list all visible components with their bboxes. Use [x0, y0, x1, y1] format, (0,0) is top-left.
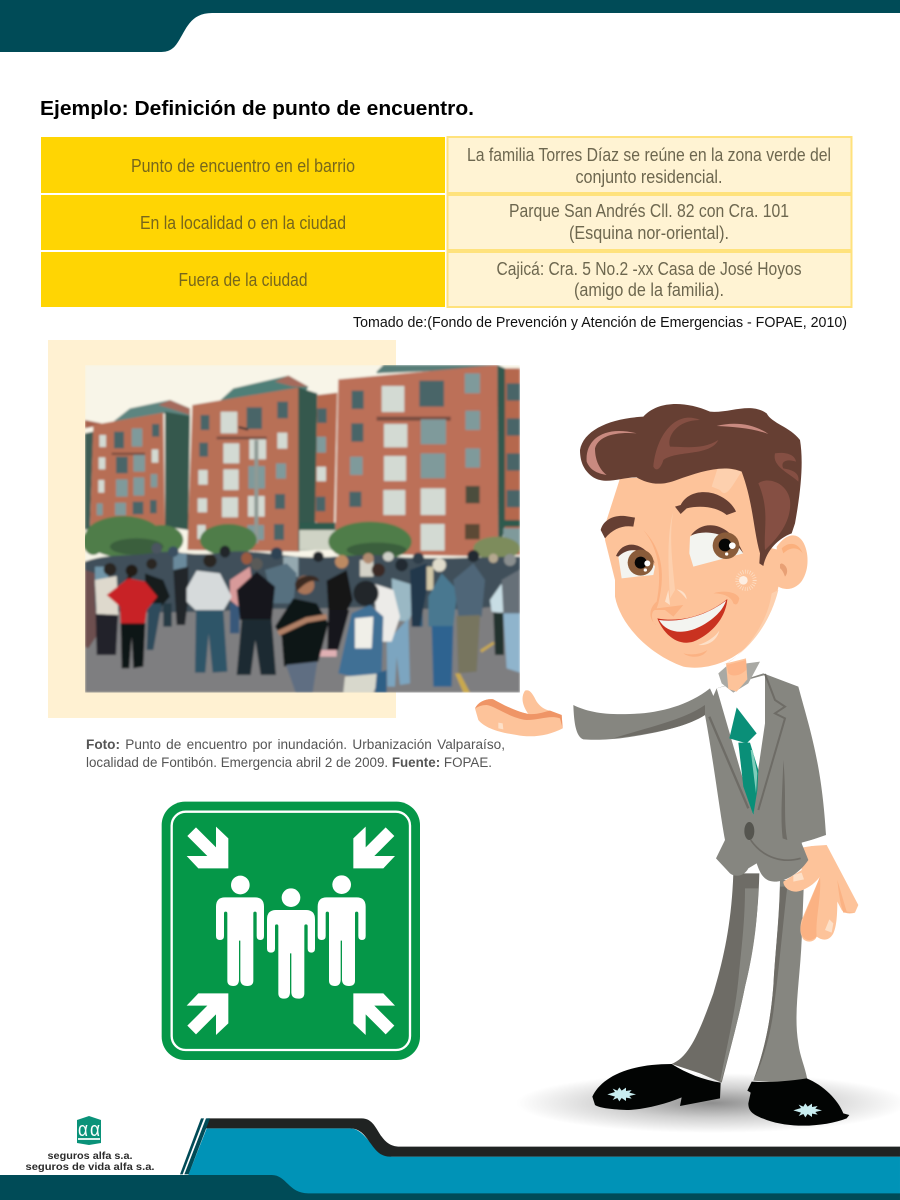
logo: seguros alfa: seguros de vida alfa s.a. — [26, 1162, 155, 1173]
character: man in grey suit presenting — [475, 404, 900, 1133]
photo caption — [86, 737, 505, 770]
teal stripes — [180, 1118, 210, 1174]
footer band — [0, 1118, 900, 1200]
table: punto de encuentro — [41, 137, 852, 307]
sleeve — [573, 688, 717, 740]
cream photo backing — [48, 340, 396, 718]
source credit: Tomado de:(Fondo de Prevención y Atención de Emergencias - FOPAE, 2010) — [353, 315, 847, 331]
left eye — [618, 550, 655, 578]
head and arm — [475, 404, 808, 740]
title: Ejemplo: Definición de punto de encuentro. — [40, 97, 474, 120]
row 3: Fuera de la ciudad — [178, 269, 308, 290]
people — [95, 550, 520, 693]
blue panel — [188, 1128, 900, 1195]
trees — [83, 516, 520, 562]
tie — [729, 707, 758, 815]
row 1: Punto de encuentro en el barrio — [131, 155, 355, 176]
eyebrows — [601, 516, 635, 538]
row 1: La familia Torres Díaz se reúne en la zona verde del — [467, 144, 831, 165]
left hand — [475, 690, 563, 736]
ear — [777, 535, 808, 589]
row 3: Cajicá: Cra. 5 No.2 -xx Casa de José Hoyos — [496, 258, 802, 279]
mouth — [657, 599, 727, 643]
photo caption: Foto: Punto de encuentro por inundación. Urbanización Valparaíso, — [86, 737, 505, 752]
logo: seguros alfa — [26, 1116, 155, 1173]
row 2: En la localidad o en la ciudad — [140, 212, 346, 233]
three people — [216, 875, 366, 999]
floor shadow — [516, 1073, 900, 1133]
row 1: conjunto residencial. — [576, 166, 722, 187]
face — [605, 465, 780, 668]
arrows pointing to centre — [187, 827, 395, 1035]
dark teal base — [0, 1175, 900, 1200]
building left — [85, 400, 190, 530]
building right — [299, 365, 520, 557]
jacket — [705, 673, 827, 882]
row 3: (amigo de la familia). — [574, 279, 724, 300]
logo: seguros alfa: seguros alfa s.a. — [48, 1151, 133, 1162]
pavement — [85, 603, 520, 693]
nose — [643, 530, 683, 625]
building centre — [187, 375, 337, 552]
neck — [726, 658, 747, 692]
sparkle on cheek — [739, 576, 748, 585]
row 1 — [41, 137, 852, 193]
row 3 — [41, 252, 852, 307]
photo caption: localidad de Fontibón. Emergencia abril 2 de 2009. Fuente: FOPAE. — [86, 755, 492, 770]
right eye — [689, 531, 743, 567]
row 2 — [41, 195, 852, 250]
collar — [718, 662, 760, 693]
right hand — [783, 845, 858, 942]
background crowd mass — [85, 551, 520, 612]
row 2: Parque San Andrés Cll. 82 con Cra. 101 — [509, 200, 789, 221]
hair — [580, 404, 802, 566]
photo: crowd at meeting point — [83, 365, 520, 693]
icon: assembly point sign — [162, 802, 420, 1060]
black ribbon — [204, 1118, 900, 1157]
logo cube — [77, 1116, 101, 1145]
top header band — [0, 0, 900, 52]
legs and shoes — [592, 873, 849, 1126]
row 2: (Esquina nor-oriental). — [569, 222, 729, 243]
logo cube: α — [78, 1119, 88, 1141]
logo cube: α — [90, 1119, 100, 1141]
